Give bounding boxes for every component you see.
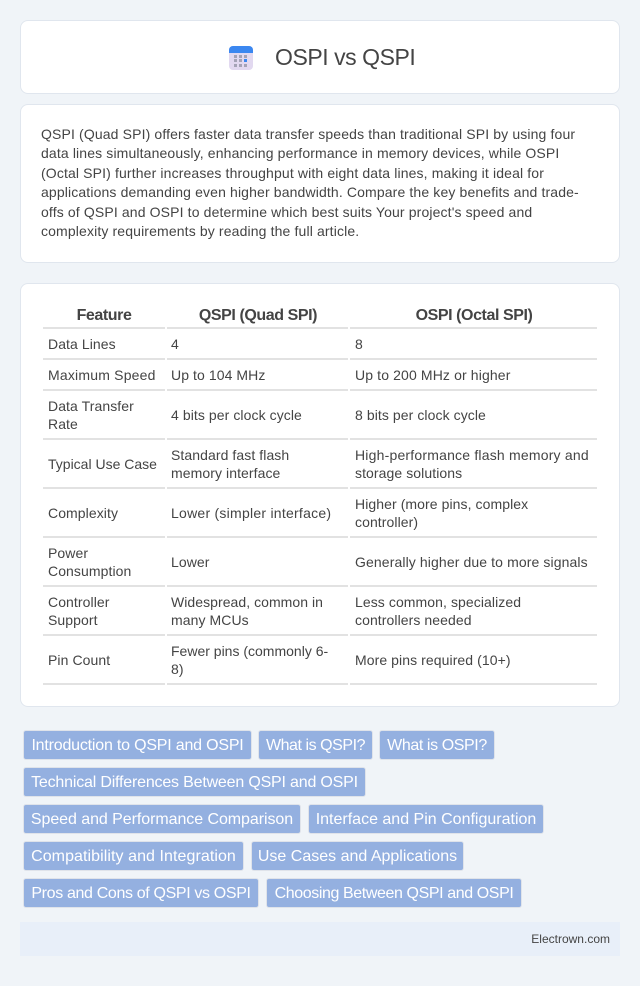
comparison table: High-performance flash memory and: [355, 447, 589, 463]
comparison table: Rate: [48, 416, 78, 432]
table header: [77, 307, 532, 324]
comparison table: 4 bits per clock cycle: [171, 407, 302, 423]
comparison table: Widespread, common in: [171, 594, 323, 610]
comparison table: 8 bits per clock cycle: [355, 407, 486, 423]
comparison table: storage solutions: [355, 465, 462, 481]
comparison table: Support: [48, 612, 98, 628]
topic tags: Choosing Between QSPI and OSPI: [275, 885, 513, 902]
summary text: offs of QSPI and OSPI to determine which best suits Your project's speed and: [41, 204, 532, 220]
footer credit: Electrown.com: [531, 932, 610, 946]
comparison table: 4: [171, 336, 179, 352]
comparison table: Up to 200 MHz or higher: [355, 367, 511, 383]
comparison table: 8): [171, 661, 184, 677]
topic tags: Pros and Cons of QSPI vs OSPI: [31, 885, 251, 902]
summary text: applications demanding even higher bandwidth. Compare the key benefits and trade-: [41, 184, 579, 200]
comparison table: Lower (simpler interface): [171, 505, 331, 521]
summary text: QSPI (Quad SPI) offers faster data transfer speeds than traditional SPI by using four: [41, 126, 575, 142]
comparison table: Complexity: [48, 505, 118, 521]
icon: calendar: [229, 46, 253, 70]
topic tags: Speed and Performance Comparison: [31, 811, 293, 828]
comparison table: Standard fast flash: [171, 447, 289, 463]
summary text: data lines simultaneously, enhancing performance in memory devices, while OSPI: [41, 145, 559, 161]
comparison table: Pin Count: [48, 652, 110, 668]
table header: OSPI (Octal SPI): [416, 307, 532, 324]
title card: [20, 20, 620, 94]
topic tags: Compatibility and Integration: [31, 848, 236, 865]
comparison table: Lower: [171, 554, 210, 570]
panel: summary: [20, 104, 620, 263]
comparison table: controller): [355, 514, 418, 530]
comparison table: 8: [355, 336, 363, 352]
comparison table: Up to 104 MHz: [171, 367, 265, 383]
comparison table: Data Lines: [48, 336, 116, 352]
comparison table: More pins required (10+): [355, 652, 511, 668]
summary text: (Octal SPI) further increases throughput with eight data lines, making it ideal for: [41, 165, 544, 181]
topic tags: What is QSPI?: [266, 737, 365, 754]
topic tags: [23, 730, 544, 908]
topic tags: Technical Differences Between QSPI and OSPI: [31, 774, 358, 791]
comparison table: Power: [48, 545, 88, 561]
table header: Feature: [77, 307, 131, 324]
topic tags: What is OSPI?: [387, 737, 487, 754]
summary text: [41, 126, 579, 239]
table header: QSPI (Quad SPI): [199, 307, 317, 324]
comparison table: Higher (more pins, complex: [355, 496, 528, 512]
summary text: complexity requirements by reading the full article.: [41, 223, 359, 239]
comparison table: Maximum Speed: [48, 367, 156, 383]
comparison table: Generally higher due to more signals: [355, 554, 588, 570]
footer: [20, 922, 620, 956]
comparison table: Controller: [48, 594, 110, 610]
comparison table: Data Transfer: [48, 398, 134, 414]
comparison table: many MCUs: [171, 612, 249, 628]
comparison table: Fewer pins (commonly 6-: [171, 643, 328, 659]
comparison table: memory interface: [171, 465, 280, 481]
comparison table: [43, 307, 597, 685]
comparison table: Less common, specialized: [355, 594, 521, 610]
comparison table: Consumption: [48, 563, 131, 579]
topic tags: Introduction to QSPI and OSPI: [31, 737, 244, 754]
comparison table: Typical Use Case: [48, 456, 157, 472]
comparison table: controllers needed: [355, 612, 472, 628]
panel: comparison table: [20, 283, 620, 707]
heading: OSPI vs QSPI: [275, 44, 415, 70]
topic tags: Interface and Pin Configuration: [316, 811, 536, 828]
topic tags: Use Cases and Applications: [258, 848, 457, 865]
